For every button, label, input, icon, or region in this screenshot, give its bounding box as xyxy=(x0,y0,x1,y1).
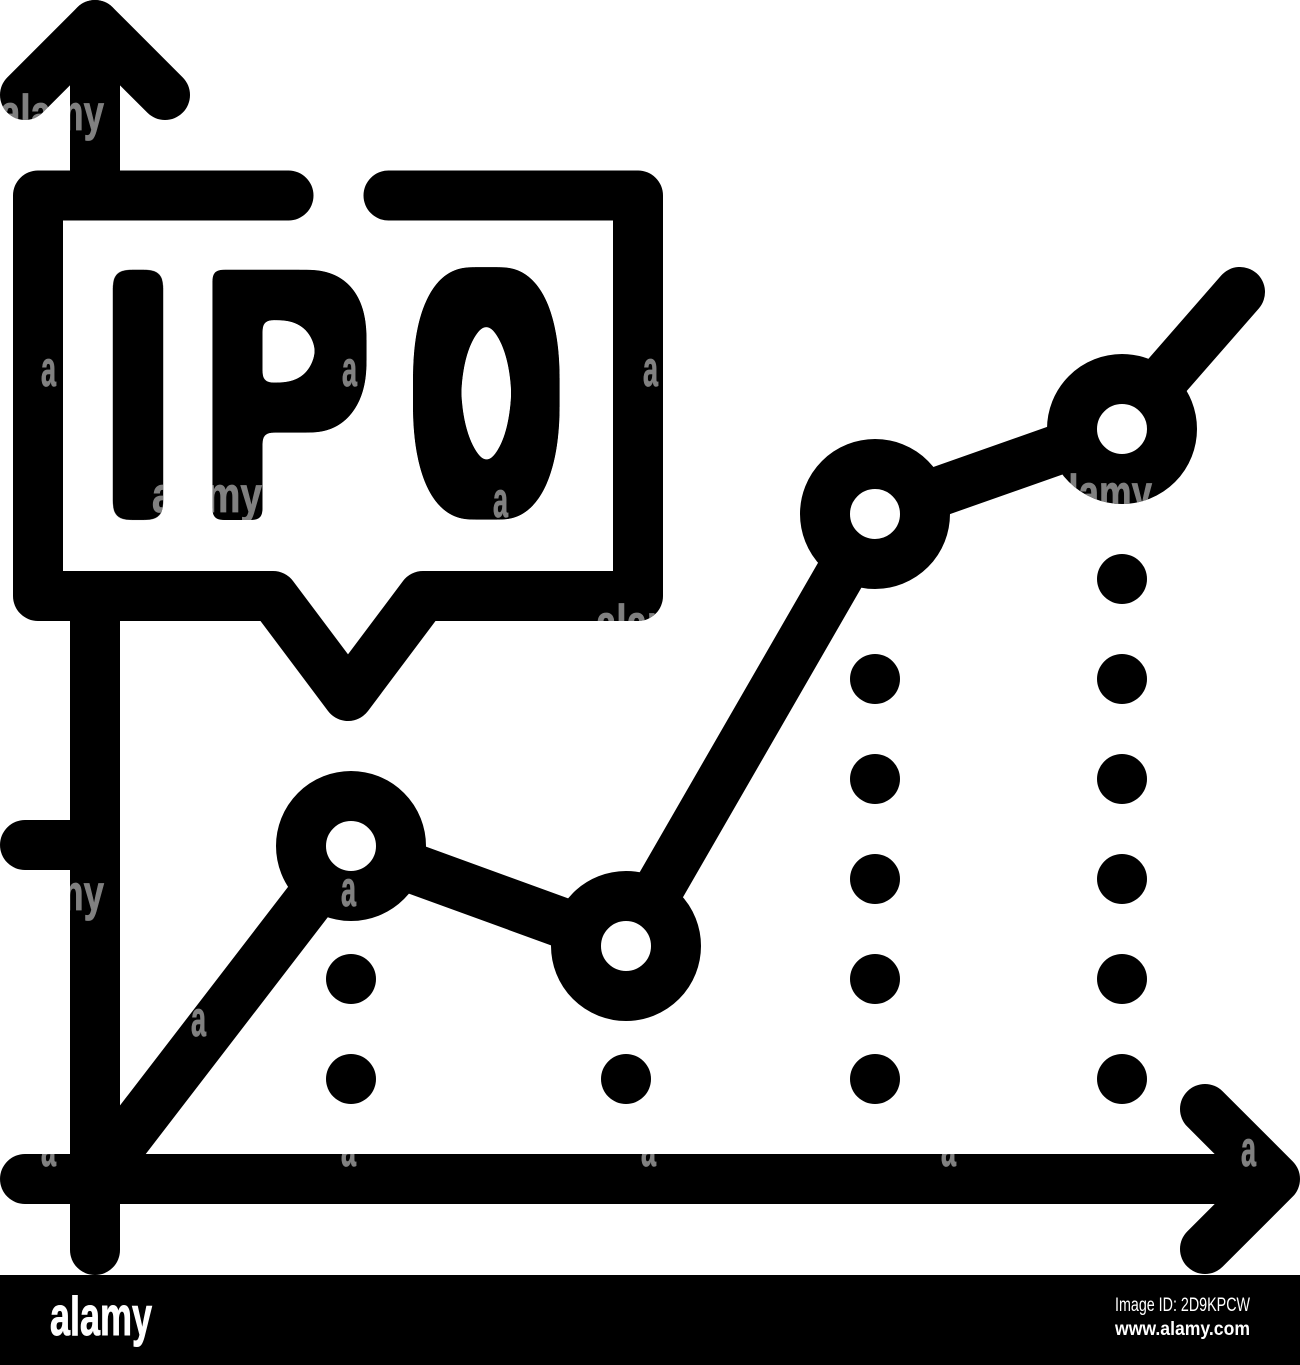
horizontal axis with arrow xyxy=(25,1109,1275,1249)
watermark: a xyxy=(493,472,509,528)
watermark: a xyxy=(191,991,207,1047)
watermark: alamy xyxy=(0,85,104,141)
watermark: a xyxy=(41,341,57,397)
watermark xyxy=(0,85,1257,1177)
watermark: alamy xyxy=(596,595,700,651)
watermark: a xyxy=(341,861,357,917)
watermark: a xyxy=(341,1121,357,1177)
watermark: alamy xyxy=(152,467,262,523)
image id: Image ID: 2D9KPCW xyxy=(1115,1295,1250,1316)
watermark: alamy xyxy=(1048,465,1152,521)
vertical axis with arrow xyxy=(25,25,165,1250)
IPO label: I xyxy=(93,213,183,577)
website: www.alamy.com xyxy=(1114,1319,1250,1340)
watermark: a xyxy=(342,341,358,397)
IPO label: P xyxy=(207,213,365,577)
rising line chart with ring markers xyxy=(95,292,1240,1179)
IPO label: O xyxy=(421,215,552,570)
watermark: alamy xyxy=(0,865,104,921)
dotted drop lines xyxy=(326,554,1147,1104)
IPO label xyxy=(93,213,552,577)
watermark: a xyxy=(1241,1121,1257,1177)
alamy logo: alamy xyxy=(50,1285,152,1347)
speech bubble xyxy=(38,196,638,696)
watermark: a xyxy=(641,1121,657,1177)
watermark: a xyxy=(643,341,659,397)
footer band xyxy=(0,1275,1300,1365)
watermark: a xyxy=(941,1121,957,1177)
watermark: a xyxy=(41,1121,57,1177)
